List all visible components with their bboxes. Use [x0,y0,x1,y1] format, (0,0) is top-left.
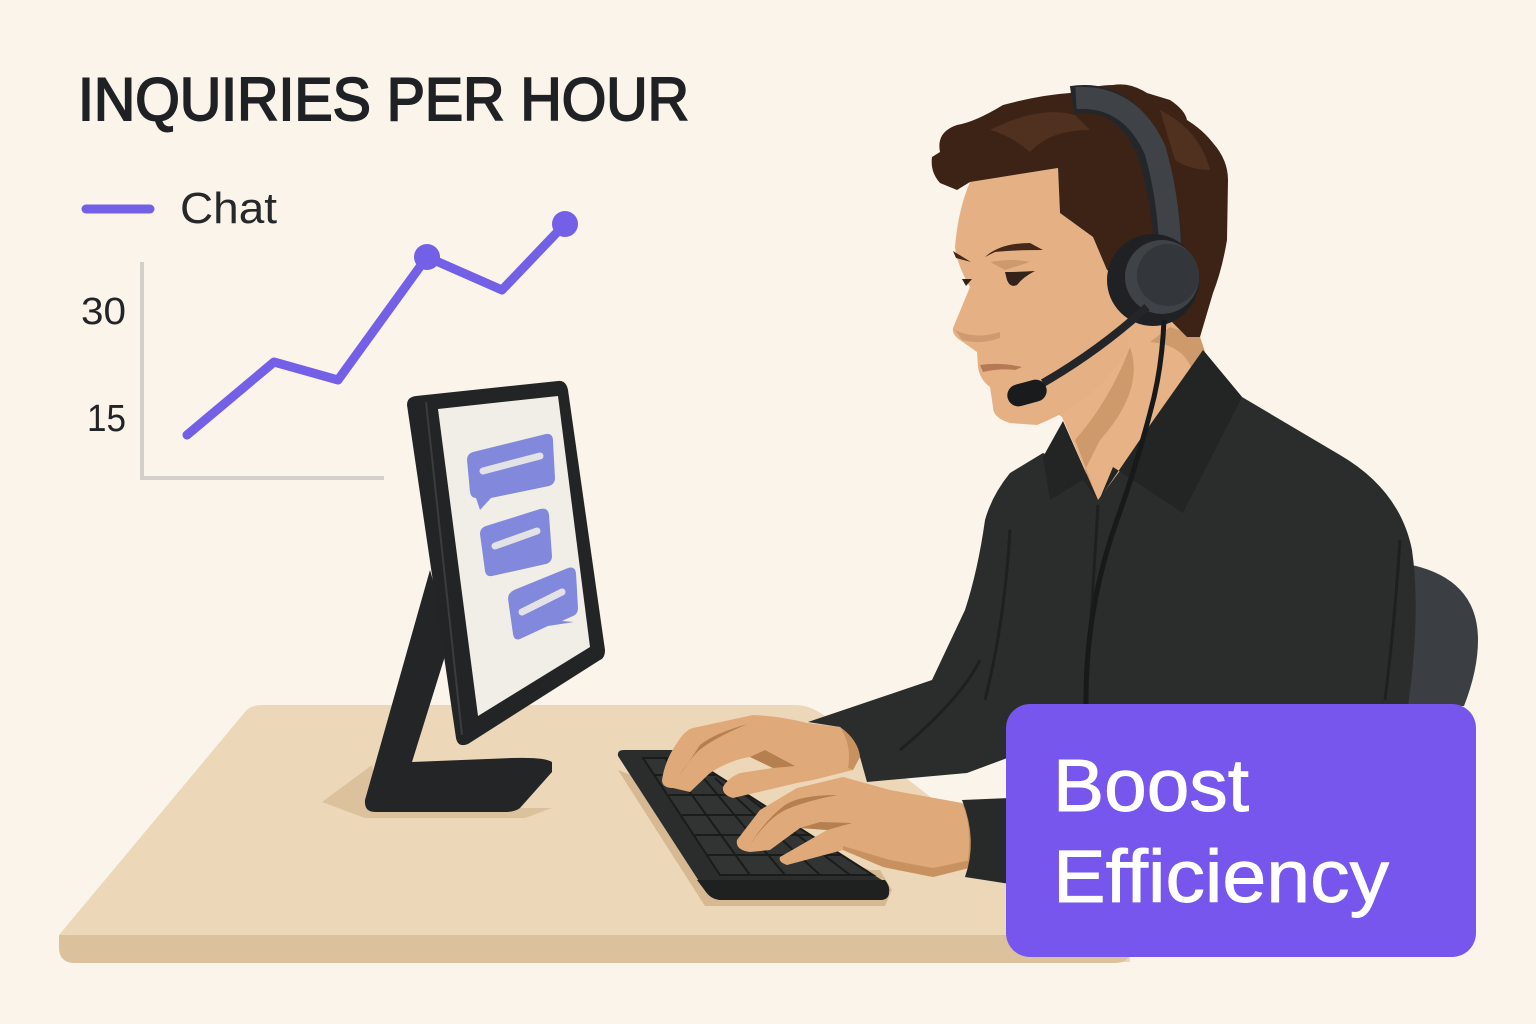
headset [1005,98,1199,705]
chart legend: Chat [180,184,277,233]
monitor frame [407,381,605,745]
y axis labels [81,291,126,440]
cream gap behind arms [860,705,1010,800]
shirt torso and far sleeve [808,350,1416,782]
face [953,168,1130,425]
neck [1037,300,1210,500]
hair [932,84,1228,337]
keyboard keys [643,758,873,875]
callout box: Boost [1053,744,1249,827]
eyes [962,271,1035,286]
monitor screen [438,396,590,716]
far hand [662,715,860,798]
monitor shadow [322,765,552,818]
monitor stand [365,570,552,812]
line chart [81,211,578,478]
chat bubbles [467,434,578,639]
mouth [980,364,1022,372]
shirt collar [1043,350,1242,513]
callout box: Efficiency [1053,835,1389,918]
title: INQUIRIES PER HOUR [78,66,689,133]
monitor [322,381,605,818]
keyboard front edge [697,880,889,900]
office chair [1400,565,1478,706]
keyboard [618,750,889,900]
y axis labels: 15 [87,398,126,440]
eye socket shadow [990,260,1030,270]
hair highlight [990,110,1210,170]
person [618,84,1416,906]
callout box [1006,704,1476,957]
neck shadow [1075,327,1210,500]
nose shadow [955,330,1000,342]
y axis labels: 30 [81,291,126,333]
near hand [737,777,973,877]
shirt folds [900,505,1400,750]
desk [59,705,1130,963]
near cuff [962,798,1010,884]
keyboard shadow [618,770,892,906]
eyebrows [953,243,1043,262]
